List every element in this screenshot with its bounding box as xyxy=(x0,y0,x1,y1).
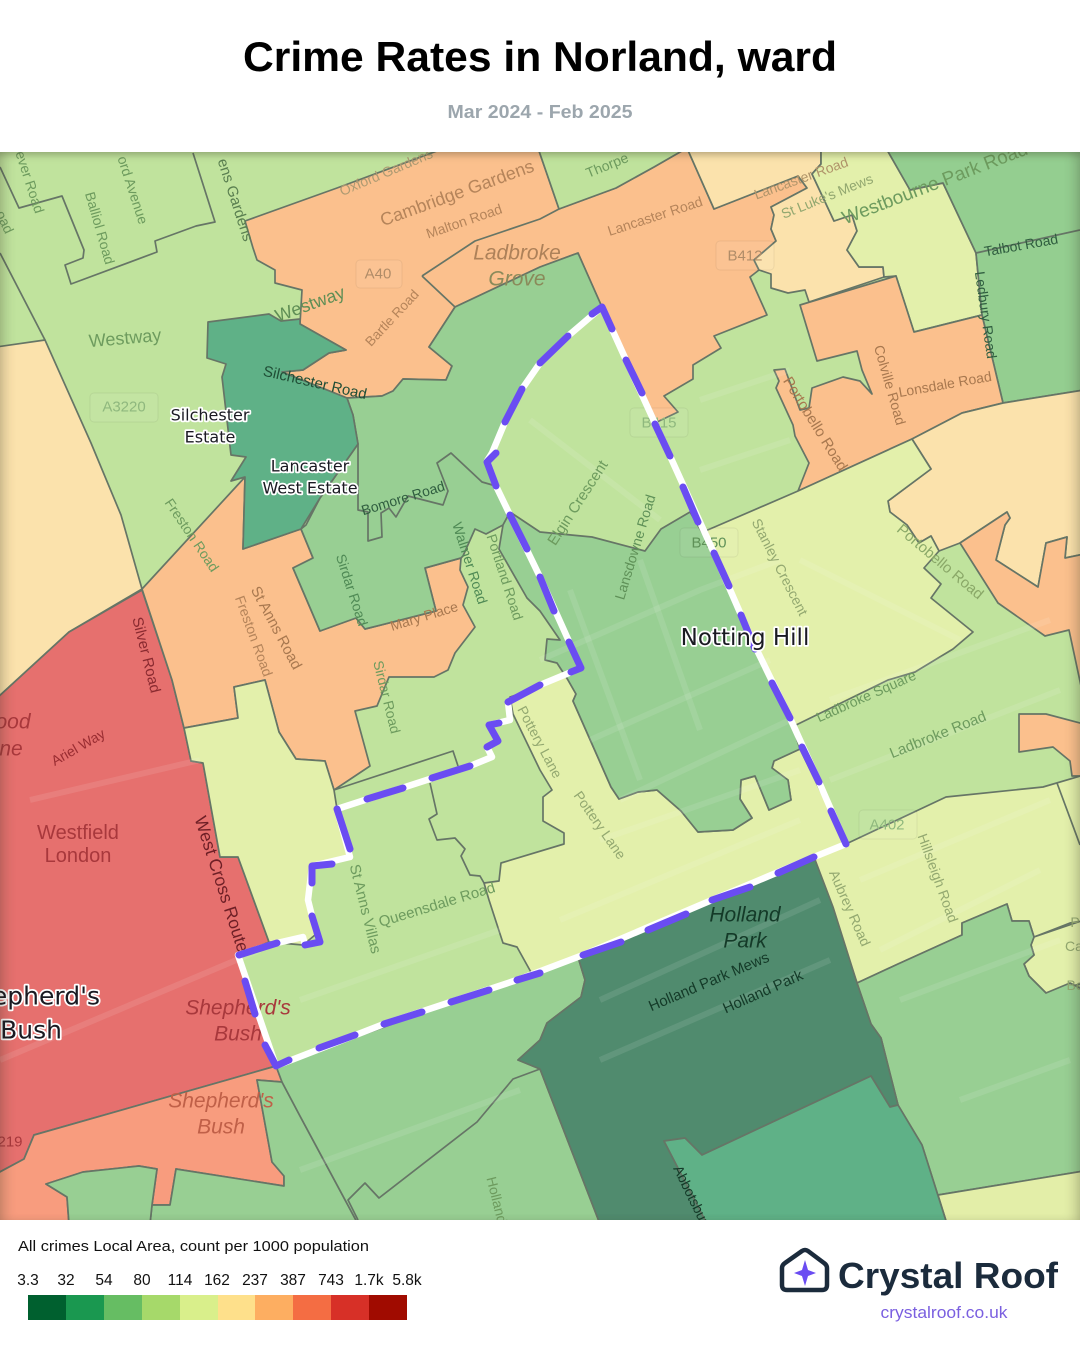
logo: Crystal Roof xyxy=(780,1248,1059,1322)
road labels: West Cross Route xyxy=(191,814,253,954)
italic place labels xyxy=(0,242,782,1138)
base map: light green areas xyxy=(0,152,1080,1220)
road labels: Ladbroke Road xyxy=(887,708,989,762)
road labels: Westway xyxy=(272,282,348,326)
choropleth map xyxy=(0,152,1080,1220)
legend title: All crimes Local Area, count per 1000 population xyxy=(18,1238,369,1255)
road number badges: B415 xyxy=(641,414,677,432)
place labels with white halo: Bush xyxy=(0,1016,62,1044)
road labels: ens Gardens xyxy=(214,157,256,243)
road labels: St Anns Road xyxy=(247,584,305,672)
road labels: Queensdale Road xyxy=(377,879,497,931)
road labels: Freston Road xyxy=(232,593,276,679)
legend scale values: 162 xyxy=(204,1272,230,1289)
road labels: Malton Road xyxy=(424,201,504,241)
ward boundary: Norland xyxy=(238,307,846,1066)
road labels: Holland Park xyxy=(720,967,806,1017)
road labels: Sirdar Road xyxy=(333,552,371,628)
italic place labels: Grove xyxy=(488,268,546,290)
road number badges: A402 xyxy=(869,816,905,834)
road labels: Portobello Road xyxy=(893,521,987,603)
road labels: Portobello Road xyxy=(779,374,851,474)
road labels: Bomore Road xyxy=(359,478,447,518)
place labels with white halo: Estate xyxy=(185,428,235,446)
wordmark: Crystal Roof xyxy=(838,1255,1059,1296)
road labels: Westway xyxy=(88,325,162,351)
italic place labels: Shepherd's xyxy=(185,996,291,1020)
legend scale values xyxy=(17,1272,422,1289)
title: Crime Rates in Norland, ward xyxy=(243,33,837,80)
road number badges: B412 xyxy=(727,248,763,264)
italic place labels: ne xyxy=(0,738,23,760)
road labels: Ariel Way xyxy=(48,725,108,769)
italic place labels: Bush xyxy=(197,1116,245,1138)
road labels: P xyxy=(1070,914,1080,930)
road labels: Westfield xyxy=(37,822,119,844)
road labels: Lonsdale Road xyxy=(897,368,993,400)
legend scale values: 32 xyxy=(57,1272,75,1289)
road number badges: A3220 xyxy=(102,398,146,416)
road labels: Mary Place xyxy=(388,598,460,634)
street network overlay xyxy=(0,370,1070,1170)
road labels: Pottery Lane xyxy=(514,703,566,781)
subtitle: date range: Mar 2024 - Feb 2025 xyxy=(448,102,632,122)
road labels: London xyxy=(45,845,111,867)
road labels: Lansdowne Road xyxy=(611,493,659,601)
map edge vignette xyxy=(0,152,1080,1220)
legend xyxy=(17,1238,422,1320)
legend scale values: 743 xyxy=(318,1272,344,1289)
legend scale values: 54 xyxy=(95,1272,113,1289)
road number badges: A40 xyxy=(365,266,391,282)
place labels with white halo: Notting Hill xyxy=(681,625,809,651)
crime rate areas xyxy=(0,148,1080,1224)
road labels: Balliol Road xyxy=(82,190,118,266)
road labels: Ladbroke Square xyxy=(814,667,919,725)
road labels: Pottery Lane xyxy=(571,788,629,862)
italic place labels: Bush xyxy=(214,1022,262,1046)
place labels with white halo: West Estate xyxy=(262,478,358,498)
road labels: Talbot Road xyxy=(983,231,1059,259)
place labels with white halo: Lancaster xyxy=(271,456,350,476)
road labels: Ledbury Road xyxy=(972,270,1000,360)
road labels: Sirdar Road xyxy=(370,659,404,735)
italic place labels: Holland xyxy=(709,904,782,926)
road labels: Cambridge Gardens xyxy=(377,156,537,230)
road labels: Colville Road xyxy=(871,343,909,427)
road labels: Lancaster Road xyxy=(606,193,704,239)
road labels: Stanley Crescent xyxy=(749,516,811,618)
italic place labels: Ladbroke xyxy=(473,242,561,264)
legend scale values: 3.3 xyxy=(17,1272,39,1289)
place labels with white halo xyxy=(0,406,809,1044)
legend scale values: 80 xyxy=(133,1272,151,1289)
road labels: Elgin Crescent xyxy=(544,457,612,549)
italic place labels: Park xyxy=(723,930,768,952)
road labels: Holland Park Mews xyxy=(646,949,772,1015)
italic place labels: Shepherd's xyxy=(168,1090,274,1112)
icon: house with star xyxy=(782,1250,827,1290)
road labels: Portland Road xyxy=(484,532,526,622)
road labels: Bartle Road xyxy=(362,287,422,349)
road labels: Silchester Road xyxy=(261,363,369,403)
legend scale values: 5.8k xyxy=(392,1272,422,1289)
road number badges: B450 xyxy=(691,534,727,552)
road labels: Hillsleigh Road xyxy=(915,831,961,925)
legend scale values: 237 xyxy=(242,1272,268,1289)
road labels: ord Avenue xyxy=(114,154,152,226)
legend scale values: 387 xyxy=(280,1272,306,1289)
road labels: St Anns Villas xyxy=(346,863,384,955)
road labels: Aubrey Road xyxy=(826,867,874,949)
legend colour swatches xyxy=(28,1295,407,1320)
road number badges xyxy=(0,241,917,1150)
road labels: Walmer Road xyxy=(449,520,491,606)
website url: crystalroof.co.uk xyxy=(880,1304,1008,1322)
road labels: St Luke's Mews xyxy=(779,170,875,222)
ward and area boundary lines xyxy=(0,153,1080,1220)
legend scale values: 114 xyxy=(168,1272,193,1289)
place labels with white halo: Silchester xyxy=(171,406,250,424)
legend scale values: 1.7k xyxy=(354,1272,384,1289)
road labels: Silver Road xyxy=(128,615,164,695)
road labels: Freston Road xyxy=(162,495,222,575)
road labels: Lancaster Road xyxy=(752,154,850,202)
